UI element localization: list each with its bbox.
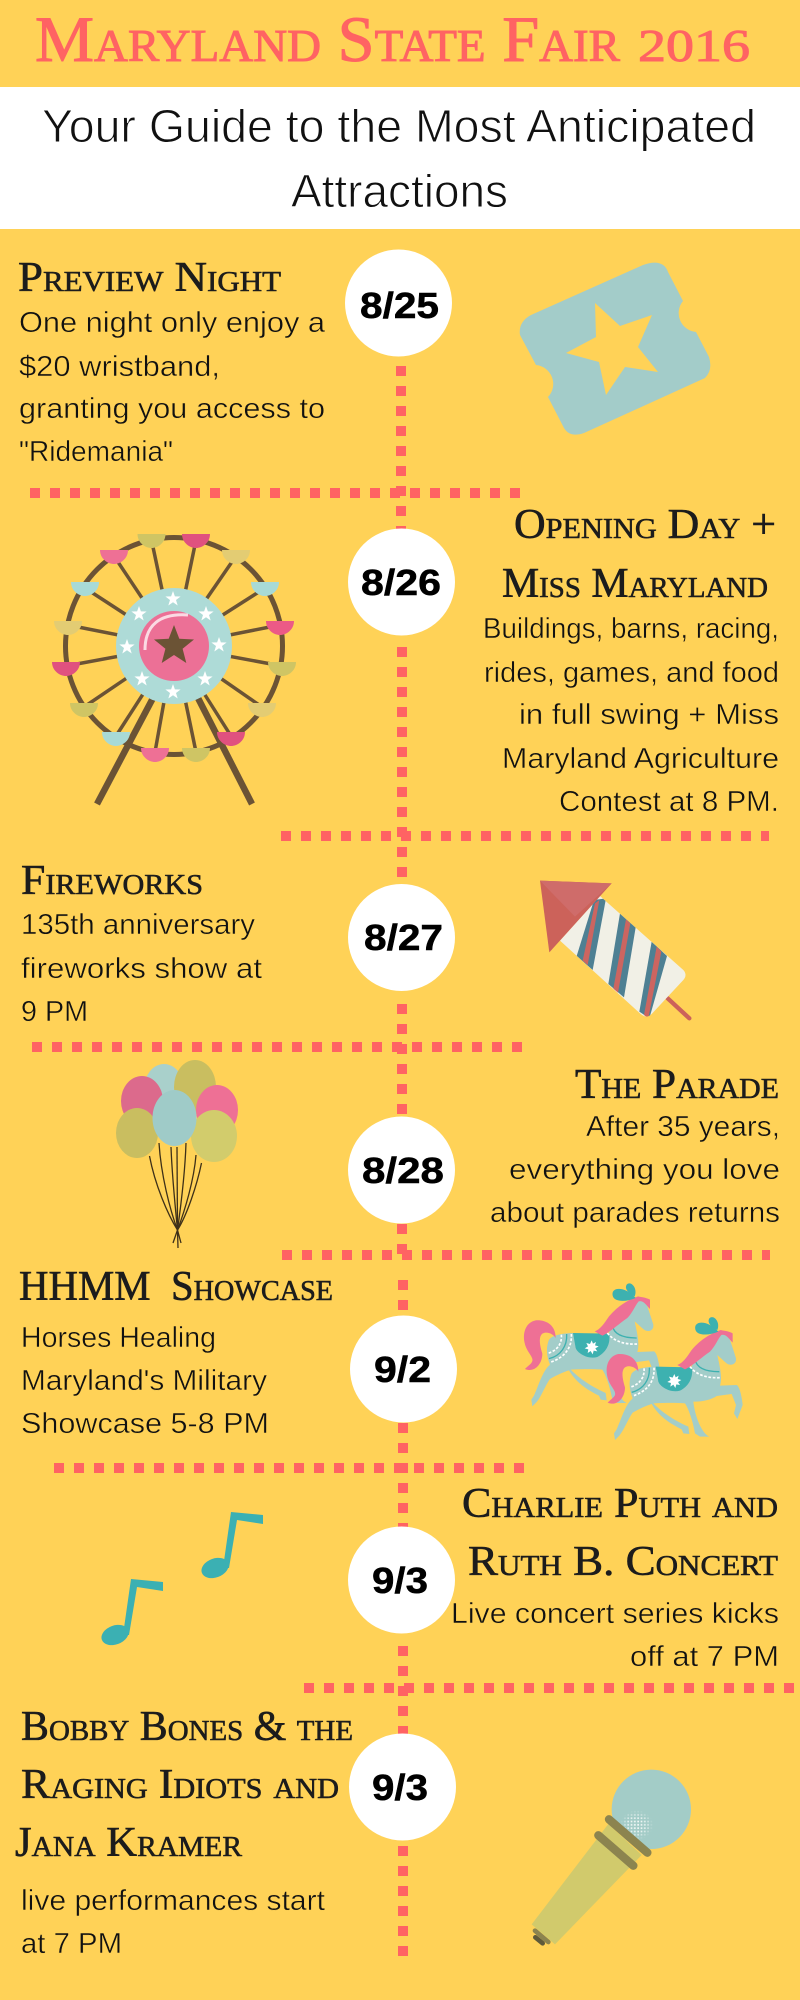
heading: Bobby Bones & the: [21, 1704, 353, 1750]
body text: Contest at 8 PM.: [559, 786, 779, 818]
heading: [462, 1481, 778, 1585]
timeline: dashed connectors: [30, 366, 794, 1956]
heading: Preview Night: [18, 255, 281, 301]
date badge: [348, 1116, 455, 1224]
body text: Maryland Agriculture: [502, 743, 779, 775]
body text: 135th anniversary: [21, 909, 256, 941]
body text: Buildings, barns, racing,: [483, 613, 779, 645]
date badge: 9/2: [374, 1349, 431, 1390]
body text: [451, 1598, 779, 1673]
icon: ferris wheel: [52, 534, 296, 804]
icon: firework rocket: [540, 881, 689, 1018]
icon: carousel horses: [524, 1283, 743, 1440]
body text: off at 7 PM: [630, 1641, 779, 1673]
date badge: [345, 250, 452, 356]
body text: [19, 307, 326, 468]
body text: [483, 613, 779, 818]
heading: [15, 1704, 353, 1866]
title: 2016: [638, 20, 750, 71]
date badge: [348, 884, 455, 991]
heading: Charlie Puth and: [462, 1481, 778, 1527]
body text: live performances start: [21, 1885, 325, 1917]
heading: Miss Maryland: [502, 561, 768, 607]
subtitle band: [0, 87, 800, 229]
date badge: [350, 1316, 457, 1422]
date badge: 8/27: [364, 917, 443, 958]
body text: $20 wristband,: [19, 351, 220, 383]
heading: Opening Day +: [514, 502, 776, 548]
icon: microphone: [532, 1770, 691, 1944]
date badge: [349, 1734, 456, 1840]
body text: [490, 1111, 780, 1229]
body text: Horses Healing: [21, 1322, 216, 1354]
body text: Maryland's Military: [21, 1365, 268, 1397]
body text: After 35 years,: [586, 1111, 780, 1143]
date badge: [348, 1526, 455, 1634]
icon: ticket: [520, 263, 710, 435]
body text: about parades returns: [490, 1197, 780, 1229]
heading: Ruth B. Concert: [468, 1539, 778, 1585]
body text: Live concert series kicks: [451, 1598, 779, 1630]
heading: Fireworks: [21, 858, 203, 904]
heading: [502, 502, 776, 607]
body text: Showcase 5-8 PM: [21, 1408, 269, 1440]
panel: HHMM showcase: [19, 1264, 743, 1440]
icon: music notes: [99, 1512, 263, 1649]
heading: HHMM Showcase: [19, 1264, 333, 1310]
date badge: 9/3: [372, 1560, 428, 1601]
title: Maryland State Fair: [35, 4, 620, 76]
date badge: 8/25: [360, 285, 439, 326]
body text: One night only enjoy a: [19, 307, 326, 339]
subtitle band: Your Guide to the Most Anticipated: [42, 100, 756, 152]
heading: Jana Kramer: [15, 1820, 243, 1866]
body text: granting you access to: [19, 393, 325, 425]
heading: The Parade: [575, 1062, 779, 1108]
date badge: 9/3: [372, 1767, 428, 1808]
body text: [21, 1885, 325, 1960]
panel: Bobby Bones concert: [15, 1704, 691, 1960]
body text: at 7 PM: [21, 1928, 122, 1960]
date badge: [348, 528, 455, 636]
panel: opening day: [52, 502, 779, 818]
icon: balloons: [116, 1060, 238, 1248]
body text: 9 PM: [21, 996, 88, 1028]
body text: everything you love: [509, 1154, 780, 1186]
subtitle band: Attractions: [291, 165, 508, 217]
panel: fireworks: [21, 858, 689, 1028]
heading: Raging Idiots and: [21, 1762, 339, 1808]
panel: Charlie Puth concert: [99, 1481, 779, 1673]
body text: "Ridemania": [19, 436, 173, 468]
body text: in full swing + Miss: [519, 699, 779, 731]
panel: preview night: [18, 250, 710, 468]
date badge: 8/28: [362, 1150, 444, 1191]
body text: fireworks show at: [21, 953, 262, 985]
date badge: 8/26: [361, 562, 441, 603]
panel: the parade: [116, 1060, 780, 1248]
body text: rides, games, and food: [484, 657, 779, 689]
body text: [21, 909, 262, 1028]
body text: [21, 1322, 269, 1440]
